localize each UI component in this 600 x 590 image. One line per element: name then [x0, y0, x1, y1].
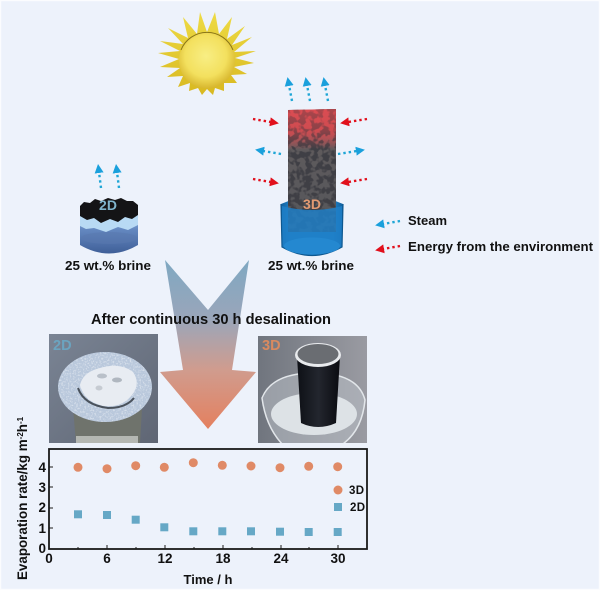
big gradient arrow: [160, 260, 256, 429]
salt/foam band: [80, 214, 138, 232]
y tick labels: 2: [38, 500, 46, 515]
brine label 2D: 25 wt.% brine: [65, 258, 151, 273]
steam arrows 3D: [263, 85, 357, 154]
energy arrows 3D: [253, 119, 367, 182]
glass dish: [262, 373, 365, 446]
cup front: [282, 206, 342, 256]
y tick labels: 4: [38, 460, 46, 475]
axes frame: [49, 449, 367, 549]
cup back: [281, 197, 343, 256]
column: [288, 109, 336, 233]
y axis title: -2: [16, 432, 25, 439]
3D evaporator: [281, 109, 343, 256]
black column: [297, 356, 340, 427]
x tick labels: 18: [215, 551, 231, 566]
icon: sun: [158, 12, 256, 95]
legend: steam and energy: [383, 213, 594, 254]
chart legend: 2D: [350, 502, 365, 514]
cup body: [80, 210, 138, 254]
steam key: [383, 221, 400, 224]
energy key: [383, 246, 400, 249]
y axis title: -1: [16, 416, 25, 424]
salt ring: [58, 352, 152, 422]
x tick labels: 6: [103, 551, 111, 566]
column top: [295, 343, 341, 367]
y axis title: Evaporation rate/kg m: [15, 439, 30, 580]
brine label 3D: 25 wt.% brine: [268, 258, 354, 273]
heading: After continuous 30 h desalination: [91, 312, 331, 328]
dark inner ring: [78, 388, 134, 408]
steam arrows 2D: [99, 172, 119, 188]
photo: 2D after desalination: [49, 334, 158, 443]
legend: steam and energy: Steam: [408, 213, 447, 228]
label 2D: 2D: [99, 197, 117, 213]
x tick labels: [45, 551, 346, 566]
label 3D: 3D: [303, 196, 321, 212]
series 3D: [74, 458, 342, 473]
series 2D: [74, 510, 342, 536]
white salt crust: [80, 366, 137, 406]
x axis title: Time / h: [184, 572, 232, 587]
dish liquid: [271, 393, 357, 435]
water surface: [81, 232, 137, 244]
legend: steam and energy: Energy from the environment: [408, 239, 594, 254]
x tick labels: 30: [330, 551, 346, 566]
chart legend: [334, 485, 365, 514]
ticks: [49, 467, 338, 549]
2D evaporator: [80, 197, 138, 254]
photo: 3D after desalination: [258, 336, 367, 446]
chart legend: 3D: [349, 485, 364, 497]
y tick labels: 1: [38, 521, 46, 536]
x tick labels: 0: [45, 551, 53, 566]
black absorber: [80, 198, 138, 223]
y tick labels: [38, 460, 46, 556]
y axis title: h: [15, 424, 30, 432]
label 3D: 3D: [262, 338, 281, 354]
x tick labels: 12: [157, 551, 173, 566]
beaker base: [73, 408, 142, 443]
chart: evaporation rate: [15, 416, 367, 587]
x tick labels: 24: [273, 551, 289, 566]
y tick labels: 0: [38, 541, 46, 556]
y tick labels: 3: [38, 480, 46, 495]
water bottom: [284, 238, 340, 254]
label 2D: 2D: [53, 338, 72, 354]
